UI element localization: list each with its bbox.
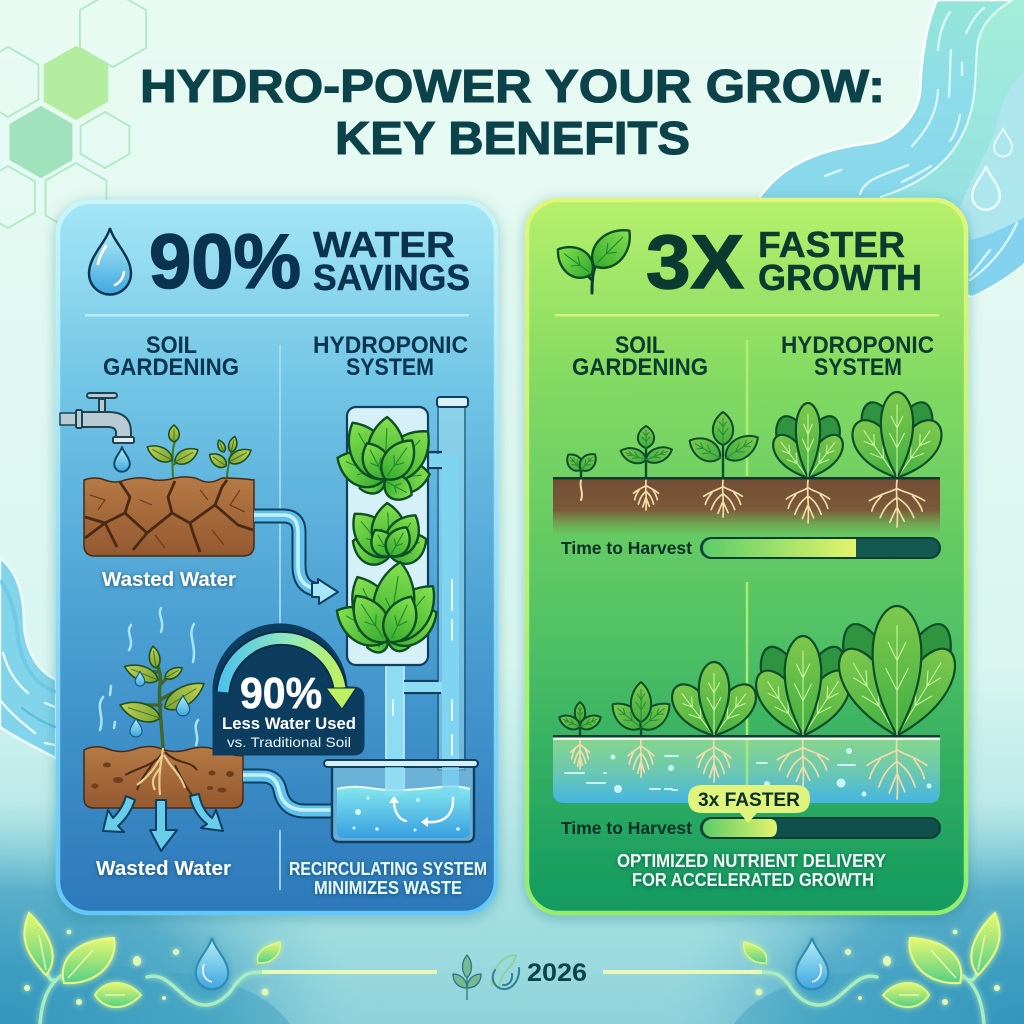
seedling stage 3 bbox=[685, 412, 763, 467]
progress bar: soil time to harvest bbox=[561, 538, 940, 558]
spinach stage 4 bbox=[748, 636, 858, 745]
caption: recirculating system: RECIRCULATING SYSTEM bbox=[289, 858, 487, 879]
icon: leaf water swirl bbox=[492, 955, 519, 989]
column labels: SOIL bbox=[146, 332, 197, 359]
seedlings on dry soil bbox=[144, 425, 254, 478]
soil with roots bbox=[84, 746, 243, 808]
sprout stage 1 bbox=[557, 702, 603, 733]
header: 3x faster growth: FASTER bbox=[758, 224, 905, 265]
icon: water drop bbox=[89, 228, 131, 294]
badge: 3x faster bbox=[688, 785, 810, 823]
column labels: HYDROPONIC bbox=[781, 332, 934, 359]
water wave left edge bbox=[0, 558, 56, 758]
column labels: SOIL bbox=[615, 332, 665, 359]
callout: 90% less water used bbox=[213, 624, 364, 755]
column labels: SYSTEM bbox=[814, 354, 902, 381]
column labels: GARDENING bbox=[572, 354, 708, 381]
spinach stage 3 bbox=[665, 662, 763, 745]
plant: bottom lettuce bbox=[328, 559, 448, 656]
plant stage 4 bbox=[767, 403, 849, 485]
header: 3x faster growth: 3X bbox=[646, 220, 744, 305]
header: 90% water savings bbox=[89, 219, 470, 305]
spinach stage 5 bbox=[829, 606, 965, 746]
title: KEY BENEFITS bbox=[335, 112, 690, 164]
column labels: HYDROPONIC bbox=[313, 332, 468, 359]
title: HYDRO-POWER YOUR GROW: bbox=[140, 60, 885, 112]
caption: recirculating system bbox=[289, 858, 487, 898]
plant stage 5 bbox=[844, 392, 950, 488]
panel: water savings bbox=[58, 202, 496, 913]
callout: 90% less water used: vs. Traditional Soil bbox=[227, 734, 351, 750]
icon: faucet bbox=[60, 393, 134, 472]
column labels bbox=[572, 332, 934, 381]
seedling stage 2 bbox=[618, 426, 675, 466]
water wave top right bbox=[760, 0, 1024, 296]
panel: faster growth bbox=[527, 200, 966, 913]
footer logo and year bbox=[453, 955, 587, 1000]
sprout stage 2 bbox=[606, 682, 676, 736]
title bbox=[140, 60, 885, 164]
caption: optimized nutrient delivery bbox=[617, 851, 886, 890]
soil growth row bbox=[553, 392, 950, 536]
column labels: SYSTEM bbox=[346, 354, 434, 381]
arrows: water leaching down bbox=[103, 794, 223, 851]
caption: optimized nutrient delivery: OPTIMIZED NUTRIENT DELIVERY bbox=[617, 851, 886, 871]
header: 3x faster growth bbox=[550, 220, 922, 305]
label: wasted water (top): Wasted Water bbox=[102, 569, 236, 591]
plant: middle lettuce bbox=[342, 502, 433, 570]
caption: optimized nutrient delivery: FOR ACCELERATED GROWTH bbox=[632, 870, 874, 890]
progress bar: hydro time to harvest bbox=[561, 818, 940, 838]
badge: 3x faster: 3x FASTER bbox=[698, 790, 800, 811]
progress bar: hydro time to harvest: Time to Harvest bbox=[561, 818, 692, 838]
hydroponic tower bbox=[328, 397, 468, 790]
caption: recirculating system: MINIMIZES WASTE bbox=[314, 877, 462, 898]
hydroponic growth row bbox=[553, 606, 965, 803]
column labels: GARDENING bbox=[103, 354, 239, 381]
footer decoration left bbox=[24, 913, 280, 1024]
reservoir tank bbox=[324, 760, 478, 842]
label: wasted water (bottom): Wasted Water bbox=[96, 858, 231, 880]
plant: top lettuce bbox=[331, 414, 441, 506]
progress bar: soil time to harvest: Time to Harvest bbox=[561, 538, 692, 558]
callout: 90% less water used: Less Water Used bbox=[222, 714, 356, 733]
column labels bbox=[103, 332, 468, 381]
footer decoration right bbox=[744, 913, 1000, 1024]
header: 3x faster growth: GROWTH bbox=[758, 257, 922, 298]
arrow: runoff to tower bbox=[254, 515, 338, 604]
callout: 90% less water used: 90% bbox=[240, 669, 322, 718]
plant losing water bbox=[100, 608, 209, 750]
dry cracked soil bbox=[84, 477, 254, 556]
pipe: soil to reservoir bbox=[243, 775, 332, 811]
decorative hexagons bbox=[0, 0, 146, 233]
footer logo and year: 2026 bbox=[527, 959, 587, 987]
header: 90% water savings: SAVINGS bbox=[313, 257, 470, 298]
icon: sprig bbox=[453, 955, 481, 1000]
icon: sprout bbox=[550, 220, 640, 293]
header: 90% water savings: WATER bbox=[313, 224, 455, 265]
header: 90% water savings: 90% bbox=[149, 219, 301, 305]
seedling stage 1 bbox=[563, 450, 600, 475]
footer divider lines bbox=[262, 970, 762, 974]
